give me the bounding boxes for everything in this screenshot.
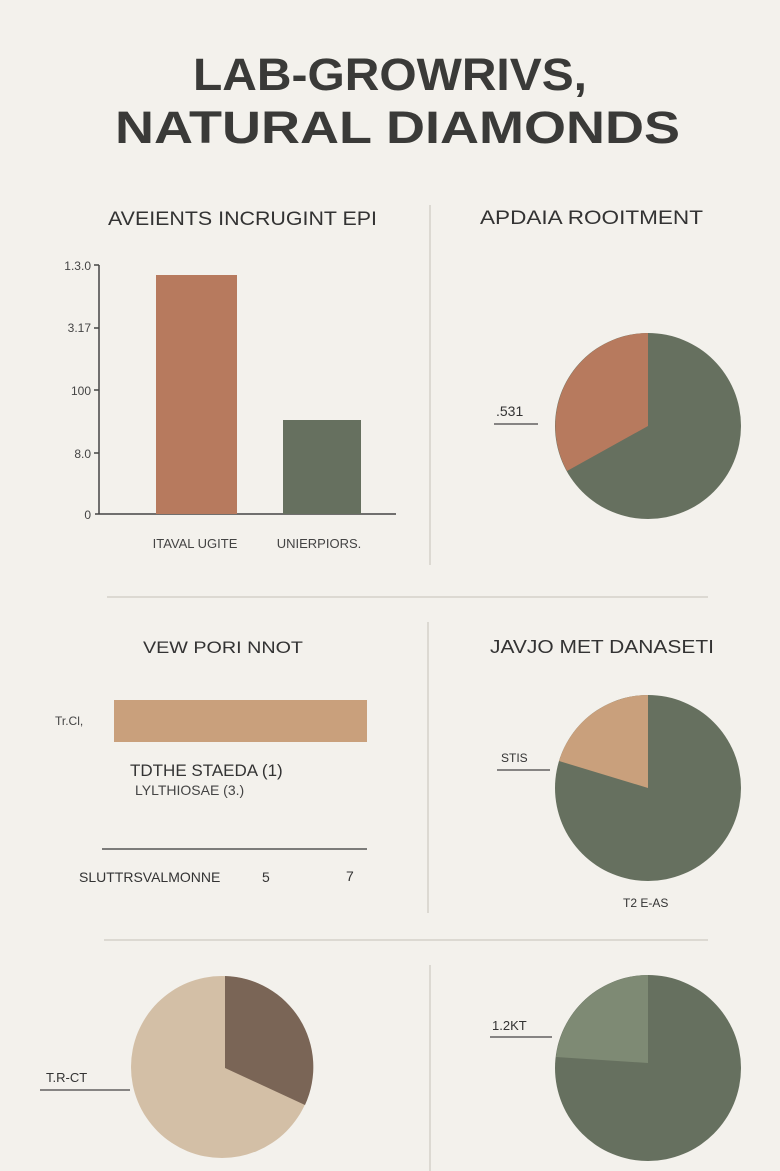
panel: bar chart: 100 [71, 384, 91, 398]
title: LAB-GROWRIVS, [193, 49, 587, 100]
title: NATURAL DIAMONDS [115, 102, 680, 153]
bar: green [283, 420, 361, 514]
panel: horizontal bar: 5 [262, 869, 270, 885]
panel: horizontal bar: SLUTTRSVALMONNE [79, 869, 220, 885]
panel: horizontal bar [55, 638, 367, 885]
panel: pie 2: STIS [501, 751, 528, 765]
axis [94, 265, 396, 514]
heading: bar chart: AVEIENTS INCRUGINT EPI [108, 209, 377, 230]
panel: pie 2: JAVJO MET DANASETI [490, 637, 714, 657]
panel: bar chart: 8.0 [74, 447, 91, 461]
panel: horizontal bar: Tr.Cl, [55, 714, 83, 728]
panel: bar chart: 3.17 [68, 321, 91, 335]
bar: terracotta [156, 275, 237, 514]
panel: pie 1 [480, 208, 741, 519]
panel: bar chart [64, 209, 396, 551]
panel: bar chart: UNIERPIORS. [277, 536, 361, 551]
panel: pie 3 [40, 976, 313, 1158]
panel: bar chart: 0 [84, 508, 91, 522]
panel: horizontal bar: TDTHE STAEDA (1) [130, 761, 283, 780]
panel: bar chart: 1.3.0 [64, 259, 91, 273]
panel: horizontal bar: LYLTHIOSAE (3.) [135, 782, 244, 798]
panel: pie 4: 1.2KT [492, 1018, 527, 1033]
panel: bar chart: ITAVAL UGITE [153, 536, 238, 551]
panel: horizontal bar: VEW PORI NNOT [143, 638, 303, 657]
panel: horizontal bar: 7 [346, 868, 354, 884]
panel: pie 2 [490, 637, 741, 910]
heading: APDAIA ROOITMENT [480, 208, 703, 229]
title [115, 49, 680, 153]
panel: pie 3: T.R-CT [46, 1070, 87, 1085]
label: .531 [496, 403, 523, 419]
panel: pie 4 [490, 975, 741, 1161]
panel: pie 2: T2 E-AS [623, 896, 668, 910]
